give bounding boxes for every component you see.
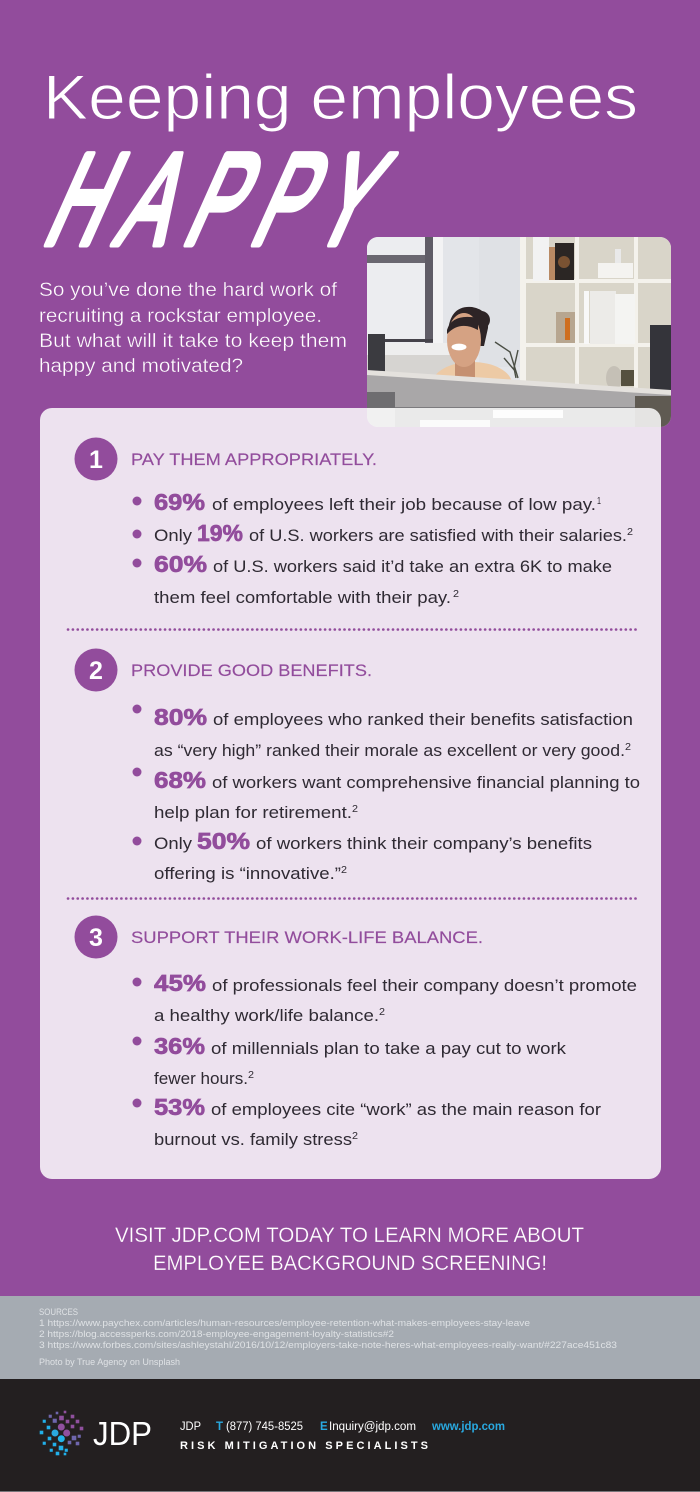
sources band: 3 https://www.forbes.com/sites/ashleystahl/2016/10/12/employers-take-note-heres-what-employees-really-want/#227ace451c83 xyxy=(39,1340,617,1350)
section 2: benefits: PROVIDE GOOD BENEFITS. xyxy=(131,661,372,680)
section 3: work-life balance: of millennials plan to take a pay cut to work xyxy=(211,1040,567,1058)
section 3: work-life balance: 45% xyxy=(154,970,206,996)
title accent word: HAPPY xyxy=(27,128,410,273)
title: Keeping employees xyxy=(43,63,638,133)
section 1: pay: 1 xyxy=(597,496,601,507)
sources band: Photo by True Agency on Unsplash xyxy=(39,1357,180,1367)
section 2: benefits: 68% xyxy=(154,767,206,793)
contact line: JDP xyxy=(180,1421,201,1433)
section 1: pay: 60% xyxy=(154,551,207,577)
section 1: pay: 2 xyxy=(453,589,459,600)
footer xyxy=(0,1379,700,1492)
section 1: pay: of U.S. workers are satisfied with their salaries. xyxy=(249,527,627,545)
shelving xyxy=(520,237,671,392)
section 3: work-life balance: of professionals feel their company doesn’t promote xyxy=(212,977,637,995)
sources band: 1 https://www.paychex.com/articles/human-resources/employee-retention-what-makes-employees-stay-leave xyxy=(39,1318,530,1328)
section 2: benefits: help plan for retirement. xyxy=(154,804,352,822)
section 1: pay: of U.S. workers said it’d take an extra 6K to make xyxy=(213,558,612,576)
logo wordmark: JDP xyxy=(93,1415,152,1452)
section 1: pay: PAY THEM APPROPRIATELY. xyxy=(131,450,377,469)
section 3: work-life balance: 36% xyxy=(154,1033,205,1059)
desk partition xyxy=(367,370,671,427)
sources band: 2 https://blog.accessperks.com/2018-employee-engagement-loyalty-statistics#2 xyxy=(39,1329,394,1339)
section 1: pay: Only xyxy=(154,527,193,545)
sources band: SOURCES xyxy=(39,1307,78,1317)
intro text xyxy=(39,280,347,377)
section 2: benefits: 2 xyxy=(625,742,631,753)
section 3: work-life balance xyxy=(74,916,637,1149)
intro text: So you’ve done the hard work of xyxy=(39,280,338,301)
call to action: VISIT JDP.COM TODAY TO LEARN MORE ABOUT xyxy=(115,1224,584,1247)
contact line: Inquiry@jdp.com xyxy=(329,1421,416,1433)
section 3: work-life balance: 3 xyxy=(89,924,103,952)
section 3: work-life balance: 2 xyxy=(352,1131,358,1142)
sources band xyxy=(0,1296,700,1379)
section 1: pay: 2 xyxy=(627,527,633,538)
contact line: E xyxy=(320,1421,328,1433)
panel: tips card xyxy=(40,408,661,1179)
woman xyxy=(436,306,511,380)
section 1: pay: them feel comfortable with their pay. xyxy=(154,589,451,607)
section 2: benefits: of employees who ranked their benefits satisfaction xyxy=(213,711,633,729)
title xyxy=(27,63,638,273)
section 2: benefits: 2 xyxy=(341,865,347,876)
tagline: RISK MITIGATION SPECIALISTS xyxy=(180,1440,428,1452)
plant xyxy=(495,342,518,378)
section 2: benefits: Only xyxy=(154,835,193,853)
section 3: work-life balance: 2 xyxy=(248,1070,254,1081)
section 1: pay xyxy=(74,438,633,607)
call to action xyxy=(115,1224,584,1275)
section 3: work-life balance: 53% xyxy=(154,1094,205,1120)
section 1: pay: 1 xyxy=(89,446,103,474)
section 1: pay: 19% xyxy=(197,520,243,546)
section 1: pay: of employees left their job because of low pay. xyxy=(212,496,596,514)
intro text: But what will it take to keep them xyxy=(39,331,347,352)
section 3: work-life balance: of employees cite “work” as the main reason for xyxy=(211,1101,602,1119)
section 2: benefits: 80% xyxy=(154,704,207,730)
section 3: work-life balance: burnout vs. family stress xyxy=(154,1131,352,1149)
section 2: benefits: of workers think their company’s benefits xyxy=(256,835,592,853)
icon: JDP dot logo xyxy=(40,1411,83,1455)
intro text: recruiting a rockstar employee. xyxy=(39,306,322,327)
section 2: benefits: offering is “innovative.” xyxy=(154,865,341,883)
call to action: EMPLOYEE BACKGROUND SCREENING! xyxy=(153,1252,547,1275)
contact line: T xyxy=(216,1421,223,1433)
section 2: benefits: 50% xyxy=(197,828,250,854)
section 3: work-life balance: fewer hours. xyxy=(154,1070,248,1088)
section 2: benefits: 2 xyxy=(89,657,103,685)
section 2: benefits: 2 xyxy=(352,804,358,815)
section 3: work-life balance: 2 xyxy=(379,1007,385,1018)
section 2: benefits: as “very high” ranked their morale as excellent or very good. xyxy=(154,742,625,760)
photo: smiling employee in office xyxy=(367,237,671,427)
contact line: (877) 745-8525 xyxy=(226,1421,303,1433)
section 1: pay: 69% xyxy=(154,489,205,515)
contact line: www.jdp.com xyxy=(431,1421,505,1433)
section 2: benefits xyxy=(74,648,640,883)
intro text: happy and motivated? xyxy=(39,356,243,377)
section 2: benefits: of workers want comprehensive financial planning to xyxy=(212,774,640,792)
section 3: work-life balance: SUPPORT THEIR WORK-LIFE BALANCE. xyxy=(131,928,483,947)
section 3: work-life balance: a healthy work/life balance. xyxy=(154,1007,379,1025)
contact line xyxy=(180,1421,505,1433)
